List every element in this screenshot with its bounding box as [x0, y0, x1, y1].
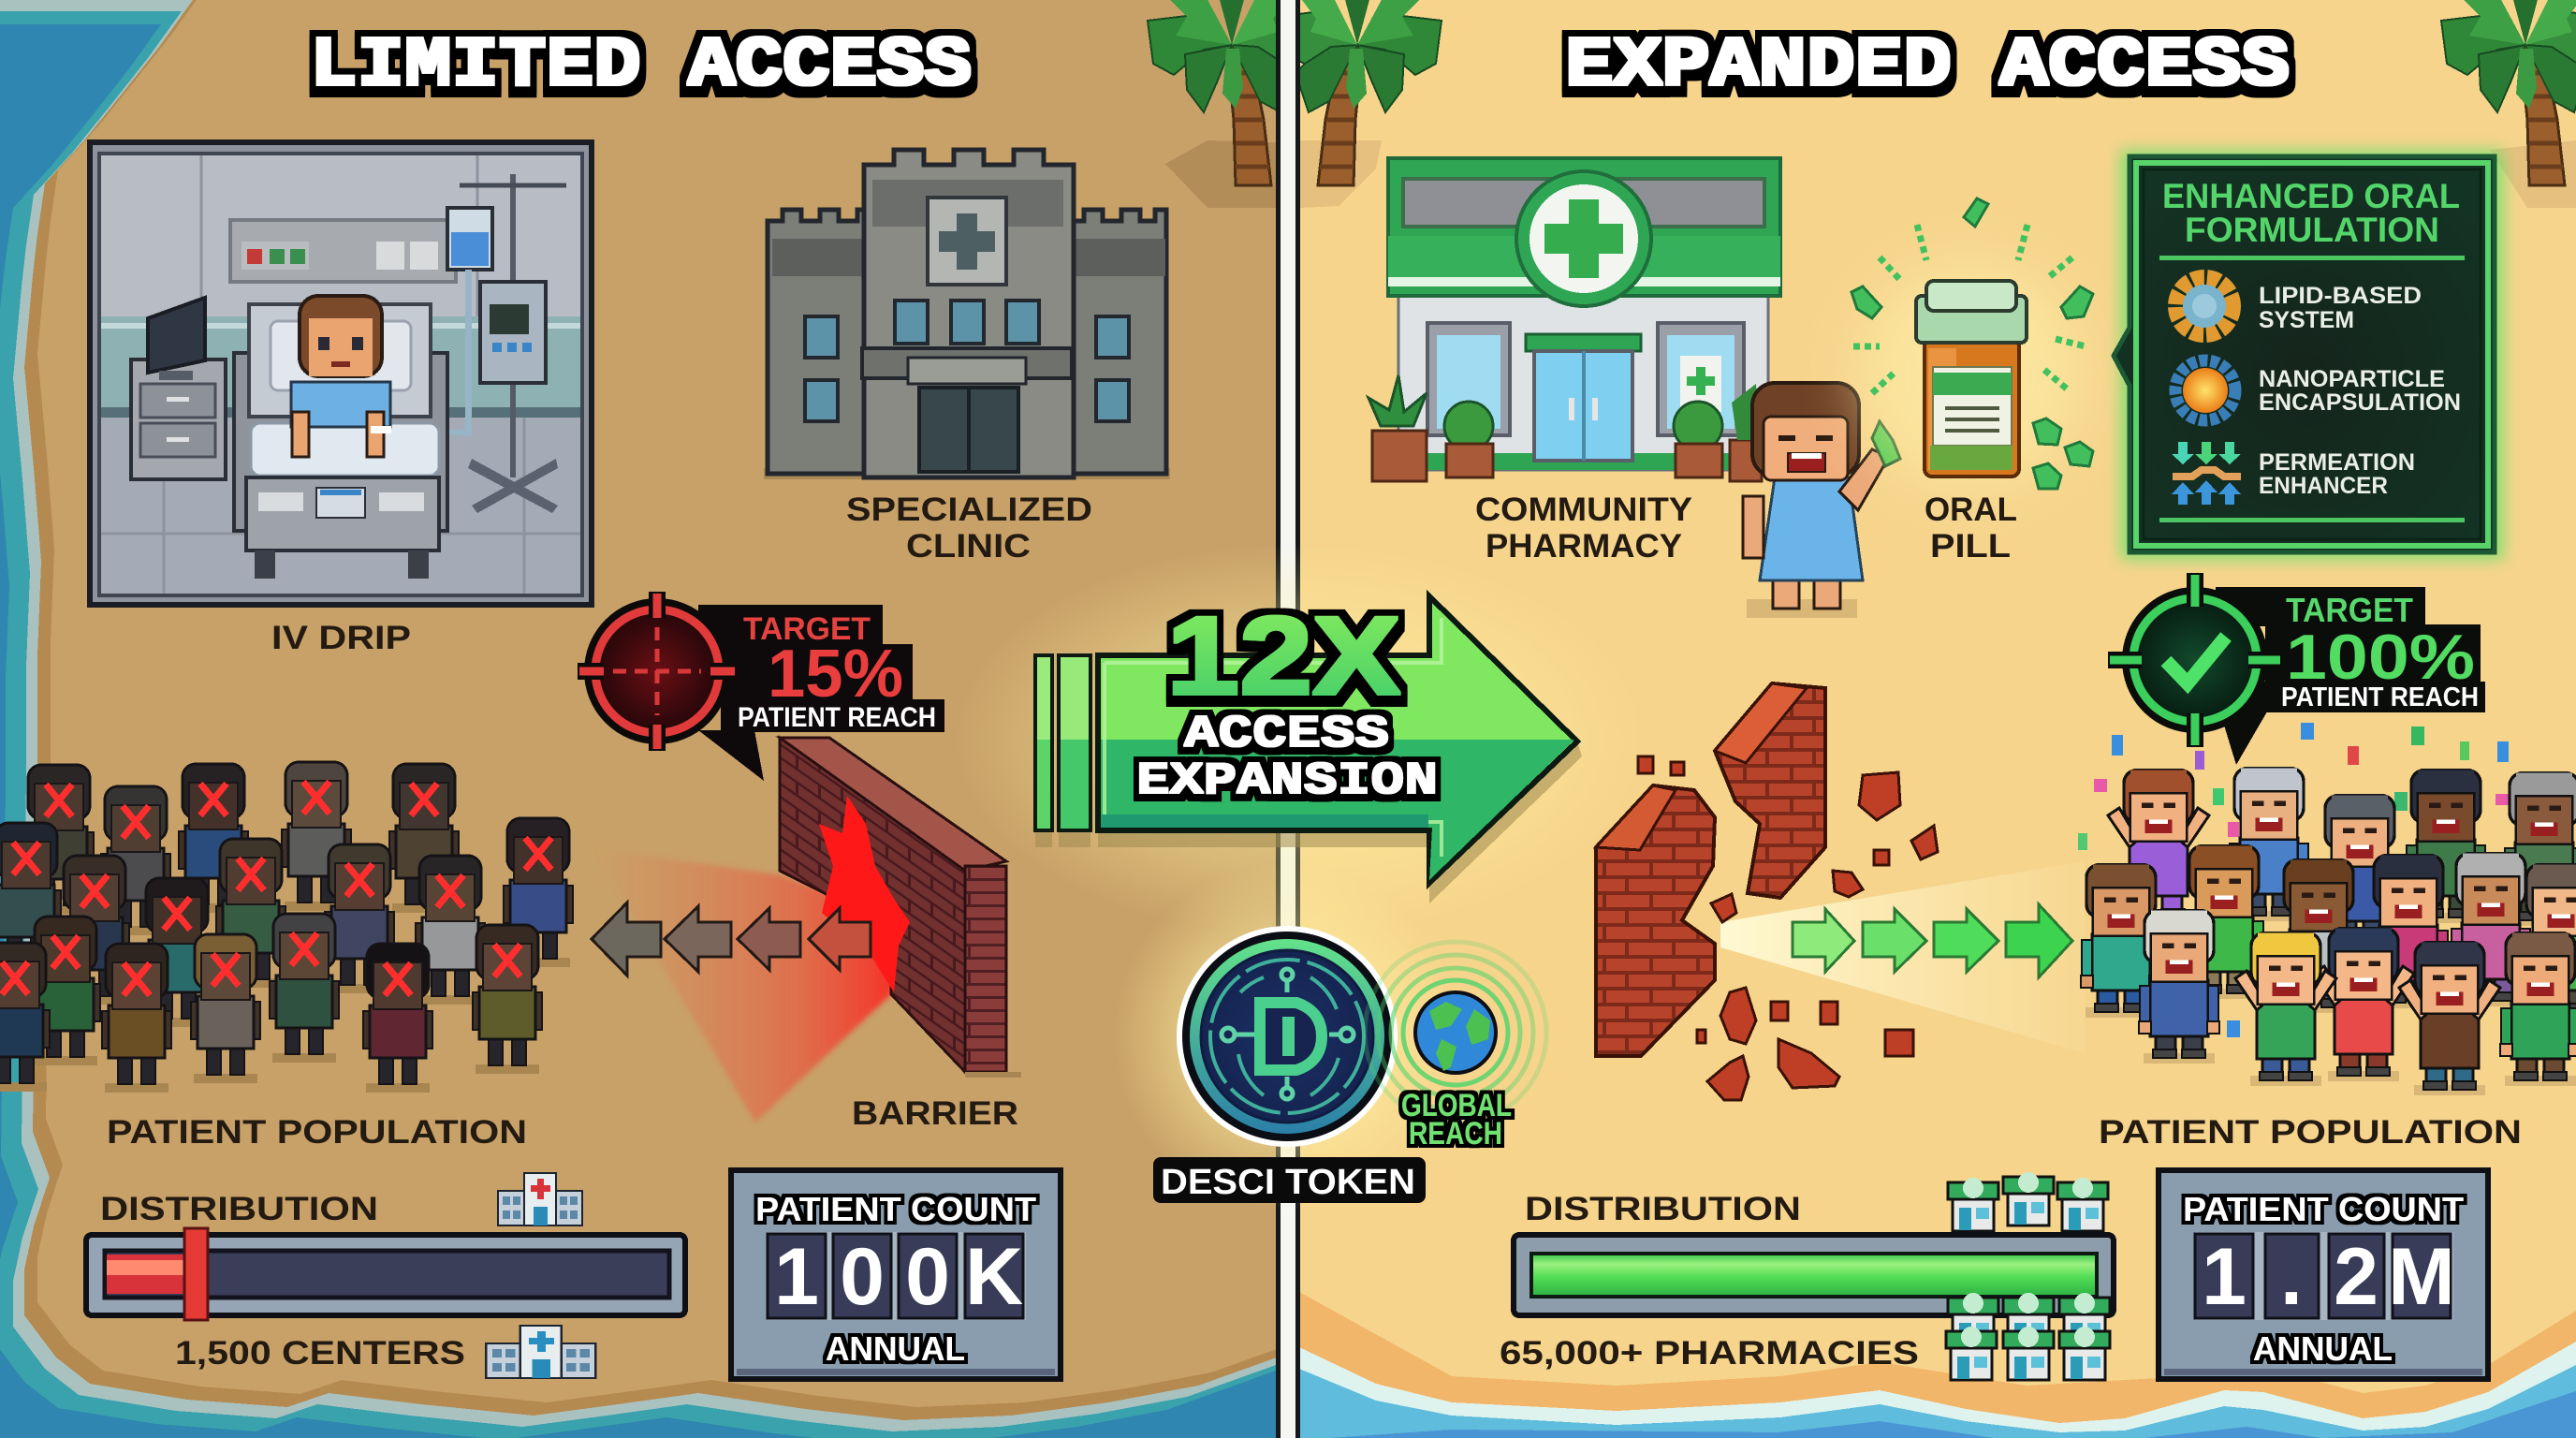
icon: red reticle [578, 592, 737, 751]
palm tree left panel [1147, 0, 1276, 187]
broken wall [1596, 683, 1938, 1100]
icon: specialized clinic fortress [764, 150, 1170, 479]
pharmacy building [1368, 158, 1780, 481]
icon: hospital with blue cross [486, 1326, 595, 1378]
arrow body [1098, 596, 1577, 883]
pharmacy door [1526, 334, 1641, 461]
label: patient population left: PATIENT POPULATION [107, 1114, 527, 1151]
patient count 1.2m: ANNUAL [2253, 1329, 2393, 1368]
label: desci token: DESCI TOKEN [1161, 1163, 1415, 1202]
icon: lipid-based system [2176, 278, 2232, 334]
label: distribution right: DISTRIBUTION [1525, 1191, 1801, 1227]
nightstand and monitor [131, 298, 226, 479]
text: 12x: 12X [1166, 594, 1400, 718]
iv pole with bag and pump [395, 174, 566, 513]
icon: permeation enhancer [2172, 442, 2241, 505]
target 100 percent callout: TARGET [2286, 591, 2413, 629]
label: oral pill: PILL [1930, 528, 2011, 565]
flying debris [1638, 756, 1938, 1100]
patient count 100k: 0 [840, 1232, 885, 1322]
heading: ENHANCED ORAL [2162, 177, 2460, 215]
text: permeation enhancer: ENHANCER [2259, 473, 2388, 499]
panel: iv drip hospital room [90, 142, 592, 605]
target 15 percent callout: PATIENT REACH [738, 702, 936, 733]
label: 1,500 centers: 1,500 CENTERS [175, 1335, 465, 1372]
patient count 1.2m: PATIENT COUNT [2183, 1190, 2464, 1228]
patient count 1.2m: 1 [2202, 1232, 2247, 1322]
label: specialized clinic: SPECIALIZED [846, 492, 1092, 528]
arrows pushed back to the left [592, 902, 871, 976]
text: nanoparticle encapsulation [2259, 366, 2461, 416]
floating pills and sparkles [1852, 198, 2093, 489]
green arrows outward [1793, 904, 2072, 977]
distribution bar expanded [1514, 1235, 2114, 1315]
speed strips [1035, 655, 1090, 830]
label: specialized clinic [846, 492, 1092, 565]
distribution bar limited [86, 1228, 685, 1320]
right panel background: sand [1299, 0, 2576, 1438]
patient count 100k: 0 [905, 1232, 950, 1322]
barrier wall [780, 738, 1021, 1078]
sand patches under palms [1165, 140, 2576, 208]
patient count 1.2m [2159, 1170, 2488, 1379]
target 100 percent callout [2108, 573, 2485, 765]
patient count 100k [731, 1170, 1061, 1379]
text: nanoparticle encapsulation: ENCAPSULATION [2259, 389, 2461, 416]
right panel ocean shoreline [1299, 1292, 2576, 1438]
icon: green reticle with check [2108, 573, 2282, 747]
barrier red glow cone [592, 847, 903, 1123]
wall crack with red light [819, 796, 910, 992]
label: distribution left: DISTRIBUTION [100, 1191, 378, 1227]
label: community pharmacy: PHARMACY [1486, 528, 1682, 565]
patient population crowd celebrating [2081, 769, 2576, 1095]
text: lipid-based system: SYSTEM [2259, 307, 2354, 333]
patient count 100k: K [965, 1232, 1023, 1322]
target 15 percent callout: 15% [768, 637, 903, 712]
label: 65,000+ pharmacies: 65,000+ PHARMACIES [1500, 1335, 1919, 1372]
label: global reach: GLOBAL [1401, 1088, 1512, 1123]
text: lipid-based system: LIPID-BASED [2259, 283, 2422, 309]
panel: enhanced oral formulation [2114, 150, 2504, 560]
center divider [1276, 0, 1300, 1438]
text: permeation enhancer [2259, 449, 2415, 499]
letter d mark [1260, 1003, 1322, 1070]
icons: pharmacies top row [1948, 1172, 2108, 1231]
patient count 100k: ANNUAL [826, 1329, 965, 1368]
label: community pharmacy [1475, 492, 1692, 565]
heading: FORMULATION [2185, 211, 2439, 249]
label: patient population right: PATIENT POPULATION [2099, 1114, 2522, 1151]
target 15 percent callout [578, 592, 944, 781]
light beam through the broken wall [1720, 861, 2085, 1053]
label: barrier: BARRIER [852, 1095, 1018, 1132]
wall panel with lights [230, 220, 456, 282]
left panel ocean shoreline [0, 0, 1417, 1438]
text: nanoparticle encapsulation: NANOPARTICLE [2259, 366, 2445, 392]
title: limited access: LIMITED ACCESS [310, 27, 972, 106]
label: global reach [1401, 1088, 1512, 1152]
icon: hospital with red cross [498, 1173, 582, 1225]
left panel background: sand [0, 0, 1277, 1438]
central 12x access expansion arrow [1035, 594, 1582, 903]
patient count 100k: PATIENT COUNT [755, 1190, 1036, 1228]
pharmacy windows [1427, 323, 1744, 435]
patient population crowd blocked [0, 762, 573, 1093]
target 100 percent callout: PATIENT REACH [2281, 682, 2479, 712]
side towers [768, 210, 1166, 474]
heading [2162, 177, 2460, 249]
patient count 100k: 1 [774, 1232, 819, 1322]
label: community pharmacy: COMMUNITY [1475, 492, 1692, 528]
label: iv drip: IV DRIP [271, 620, 411, 656]
palm tree right panel far edge [2441, 0, 2576, 185]
text: expansion: EXPANSION [1136, 756, 1438, 807]
icons: pharmacies lower rows [1946, 1293, 2110, 1380]
token glow [1114, 863, 1460, 1210]
desci token coin [1177, 926, 1398, 1147]
oral pill bottle [1852, 198, 2093, 489]
patient count 1.2m: 2 [2334, 1232, 2378, 1322]
text: permeation enhancer: PERMEATION [2259, 449, 2415, 476]
label: oral pill [1925, 492, 2017, 565]
icon: nanoparticle [2175, 360, 2235, 420]
sad patient in bed [291, 296, 391, 457]
text: lipid-based system [2259, 283, 2422, 333]
pharmacy roof sign [1388, 158, 1780, 306]
icon: globe with signal rings [1365, 942, 1546, 1123]
target 15 percent callout: TARGET [743, 611, 871, 647]
pill in hand [1872, 421, 1900, 466]
central glow around arrow [955, 543, 1647, 936]
label: oral pill: ORAL [1925, 492, 2017, 528]
potted plants [1368, 375, 1762, 481]
palm tree right panel near divider [1300, 0, 1442, 187]
text: access: ACCESS [1184, 710, 1389, 760]
confetti [2078, 723, 2510, 1037]
center tower [864, 150, 1074, 477]
label: global reach: REACH [1409, 1116, 1502, 1152]
hospital bed [234, 304, 447, 579]
patient count 1.2m: . [2280, 1232, 2303, 1322]
title: expanded access: EXPANDED ACCESS [1565, 27, 2290, 106]
happy patient with pill [1743, 383, 1900, 618]
label: specialized clinic: CLINIC [906, 528, 1031, 565]
target 100 percent callout: 100% [2286, 622, 2475, 693]
patient count 1.2m: M [2388, 1232, 2455, 1322]
